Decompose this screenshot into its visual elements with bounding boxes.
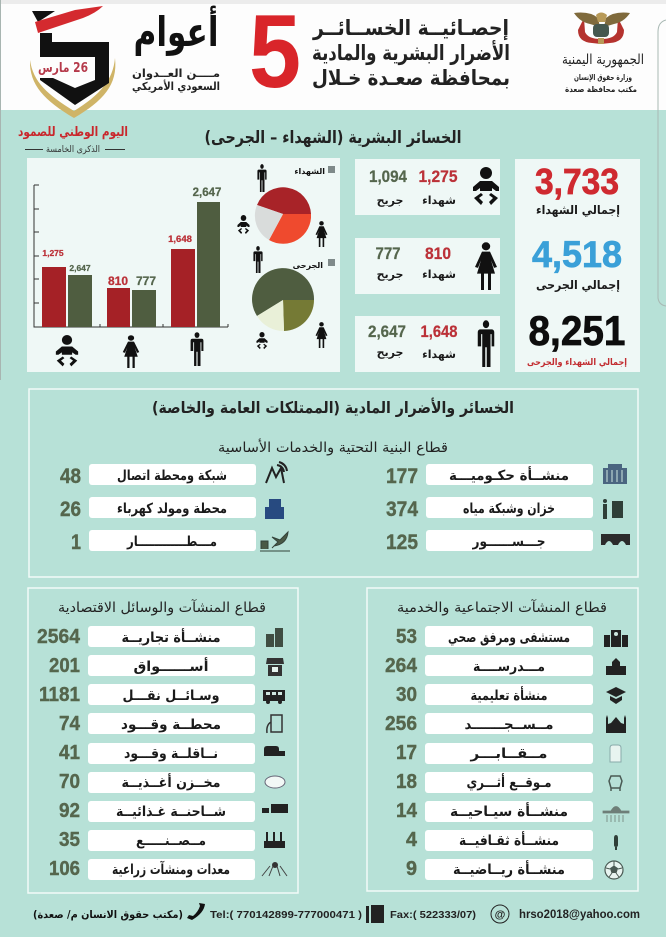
row: food truck: شــاحنــة غـذائيــة <box>116 804 226 820</box>
bar chart: 2,647 <box>69 263 91 273</box>
subheading: infrastructure: قطاع البنية التحتية والخدمات الأساسية <box>218 438 448 456</box>
row: fuel tanker: 41 <box>59 742 80 764</box>
row: factory <box>59 829 285 851</box>
row: archaeological: مـوقــع أثـــري <box>466 773 552 792</box>
row: cemeteries: مــقــابـــر <box>469 746 548 762</box>
row: sports: منشــأة ريــاضيــة <box>453 860 565 878</box>
icon: woman <box>123 335 139 368</box>
panel: totals: إجمالي الجرحى <box>536 278 620 292</box>
heading: national day <box>18 125 128 155</box>
panel: totals: إجمالي الشهداء والجرحى <box>527 358 627 368</box>
row: school <box>385 655 626 677</box>
row: agriculture <box>49 858 287 880</box>
card: women: 777 <box>376 244 400 263</box>
row: food store: 70 <box>59 771 80 793</box>
icon: man <box>191 332 203 366</box>
row: hospital: 53 <box>396 626 417 648</box>
panel: economic sector <box>28 588 298 893</box>
icon: at sign <box>491 905 509 923</box>
row: archaeological <box>396 771 622 793</box>
row: communications <box>60 462 287 488</box>
emblem <box>574 12 630 44</box>
heading: years: السعودي الأمريكي <box>132 79 220 93</box>
pie chart: wounded: الجرحى <box>293 261 323 270</box>
icon: baby <box>56 335 78 366</box>
ministry emblem and name: مكتب محافظة صعدة <box>565 85 637 94</box>
panel: totals <box>515 159 640 372</box>
row: transport: وسـائــل نقـــل <box>122 688 220 704</box>
row: commercial <box>37 626 283 648</box>
office name: (مكتب حقوق الانسان م/ صعدة) <box>33 909 183 921</box>
row: mosque <box>385 713 626 735</box>
pie chart: martyrs <box>237 164 335 247</box>
fax: Fax:( 522333/07) <box>390 909 476 921</box>
email: hrso2018@yahoo.com <box>519 907 640 921</box>
header band <box>0 0 666 110</box>
row: factory: مــصــنـــــع <box>136 833 206 849</box>
row: agriculture: 106 <box>49 858 80 880</box>
row: culture: 4 <box>406 829 418 851</box>
heading: human losses: الخسائر البشرية (الشهداء – الجرحى) <box>204 128 462 148</box>
ministry emblem and name: الجمهورية اليمنية <box>562 52 644 68</box>
row: tourism: 14 <box>396 800 418 822</box>
row: fuel station: محطــة وقـــود <box>121 717 221 733</box>
card: women: جريح <box>377 268 403 281</box>
row: transport: 1181 <box>39 684 80 706</box>
row: markets <box>49 655 284 677</box>
row: fuel station <box>59 713 282 735</box>
ministry emblem and name: وزارة حقوق الإنسان <box>574 73 632 82</box>
row: food store <box>59 771 285 793</box>
card: children: شهداء <box>422 194 456 207</box>
row: mosque: 256 <box>385 713 417 735</box>
row: power station <box>60 497 284 521</box>
card: men <box>355 316 500 372</box>
card: men: شهداء <box>422 348 456 361</box>
row: bridges: 125 <box>386 531 418 554</box>
row: fuel station: 74 <box>59 713 81 735</box>
row: education: منشأة تعليمية <box>470 686 548 704</box>
card: children: جريح <box>377 194 403 207</box>
date label: 26 مارس <box>38 61 88 76</box>
heading: national day: اليوم الوطني للصمود <box>18 125 128 140</box>
card: women <box>355 238 500 294</box>
row: cemeteries: 17 <box>396 742 417 764</box>
row: agriculture: معدات ومنشآت زراعية <box>112 860 230 878</box>
row: culture <box>406 829 618 851</box>
row: hospital: مستشفى ومرفق صحي <box>448 630 570 646</box>
row: food truck <box>59 800 288 822</box>
panel: totals: 4,518 <box>532 234 622 275</box>
row: factory: 35 <box>59 829 80 851</box>
row: communications: 48 <box>60 465 81 488</box>
heading: social: قطاع المنشآت الاجتماعية والخدمية <box>397 599 607 616</box>
card: men: جريح <box>377 346 403 359</box>
bar chart: 1,648 <box>168 234 192 245</box>
card: children <box>355 159 500 215</box>
row: government building <box>386 464 627 488</box>
card: men: 1,648 <box>420 322 458 341</box>
row: archaeological: 18 <box>396 771 417 793</box>
heading: economic: قطاع المنشآت والوسائل الاقتصادية <box>58 599 266 616</box>
icon: phone <box>187 903 205 920</box>
row: bridges <box>386 530 630 554</box>
row: tourism: منشــأة سيـاحيــة <box>450 802 568 820</box>
row: school: مـــدرســــة <box>473 659 545 675</box>
row: water tanks: 374 <box>386 498 418 521</box>
row: cemeteries <box>396 742 621 764</box>
row: culture: منشــأة ثقـافيــة <box>459 831 559 849</box>
row: mosque: مــســجـــــــد <box>464 717 554 733</box>
red bullet <box>35 6 103 33</box>
row: airport <box>71 530 290 554</box>
row: food truck: 92 <box>59 800 80 822</box>
main title: إحصـائيــة الخســائــر <box>312 16 509 40</box>
panel: infrastructure sector <box>29 389 638 577</box>
main title: الأضرار البشرية والمادية <box>312 39 510 65</box>
main title <box>312 16 510 90</box>
panel: social sector <box>367 588 638 891</box>
row: airport: مـــطــــــــــــار <box>126 534 217 550</box>
row: power station: 26 <box>60 498 81 521</box>
bar chart <box>34 185 228 368</box>
row: government building: 177 <box>386 465 418 488</box>
footer contact line <box>33 903 640 923</box>
card: women: شهداء <box>422 268 456 281</box>
row: school: 264 <box>385 655 418 677</box>
row: power station: محطة ومولد كهرباء <box>117 501 227 517</box>
card: children: 1,094 <box>369 167 407 186</box>
row: fuel tanker: نــاقلــة وقـــود <box>124 746 218 762</box>
heading: national day: الذكرى الخامسة <box>46 145 100 155</box>
row: government building: منشــأة حكـوميـــة <box>449 466 569 484</box>
row: tourism <box>396 800 629 822</box>
row: hospital <box>396 626 628 648</box>
row: commercial: منشــأة تجاريــة <box>122 628 220 646</box>
ministry emblem and name <box>562 12 644 94</box>
heading: years <box>132 5 220 93</box>
panel: totals: 8,251 <box>528 307 626 354</box>
heading: material losses: الخسائر والأضرار المادية (الممتلكات العامة والخاصة) <box>152 398 514 417</box>
logo: 26 March five years <box>30 6 115 118</box>
main title: بمحافظة صعـدة خـلال <box>312 66 510 90</box>
footer contact line: @ <box>495 909 506 921</box>
row: water tanks: خزان وشبكة مياه <box>463 501 555 517</box>
row: education: 30 <box>396 684 417 706</box>
row: markets: أســــــواق <box>134 657 208 675</box>
bar chart: 2,647 <box>193 187 221 199</box>
row: communications: شبكة ومحطة اتصال <box>117 468 227 484</box>
row: airport: 1 <box>71 531 81 554</box>
row: education <box>396 684 626 706</box>
icon: fax <box>366 905 384 923</box>
card: men: 2,647 <box>368 322 406 341</box>
card: women: 810 <box>425 244 451 263</box>
row: markets: 201 <box>49 655 80 677</box>
bar chart: 1,275 <box>42 248 64 258</box>
row: food store: مخــزن أغــذيــة <box>122 773 220 791</box>
panel: charts <box>27 158 340 372</box>
bar chart: 810 <box>108 274 128 288</box>
row: transport <box>39 684 285 706</box>
row: bridges: جـــســــــور <box>472 534 546 550</box>
heading: years: مــــن العــدوان <box>132 67 220 80</box>
row: sports: 9 <box>406 858 417 880</box>
gold shield <box>30 58 115 118</box>
heading: years: أعوام <box>134 5 218 57</box>
panel: totals: إجمالي الشهداء <box>536 203 620 217</box>
bar chart: 777 <box>136 274 156 288</box>
card: children: 1,275 <box>418 167 458 186</box>
pie chart: wounded <box>252 246 335 349</box>
telephone: Tel:( 770142899-777000471 ) <box>210 909 362 921</box>
row: commercial: 2564 <box>37 626 81 648</box>
row: fuel tanker <box>59 742 285 764</box>
row: water tanks <box>386 497 623 521</box>
row: sports <box>406 858 623 880</box>
black numeral five <box>32 11 109 105</box>
panel: totals: 3,733 <box>535 161 619 202</box>
pie chart: martyrs: الشهداء <box>294 167 325 176</box>
